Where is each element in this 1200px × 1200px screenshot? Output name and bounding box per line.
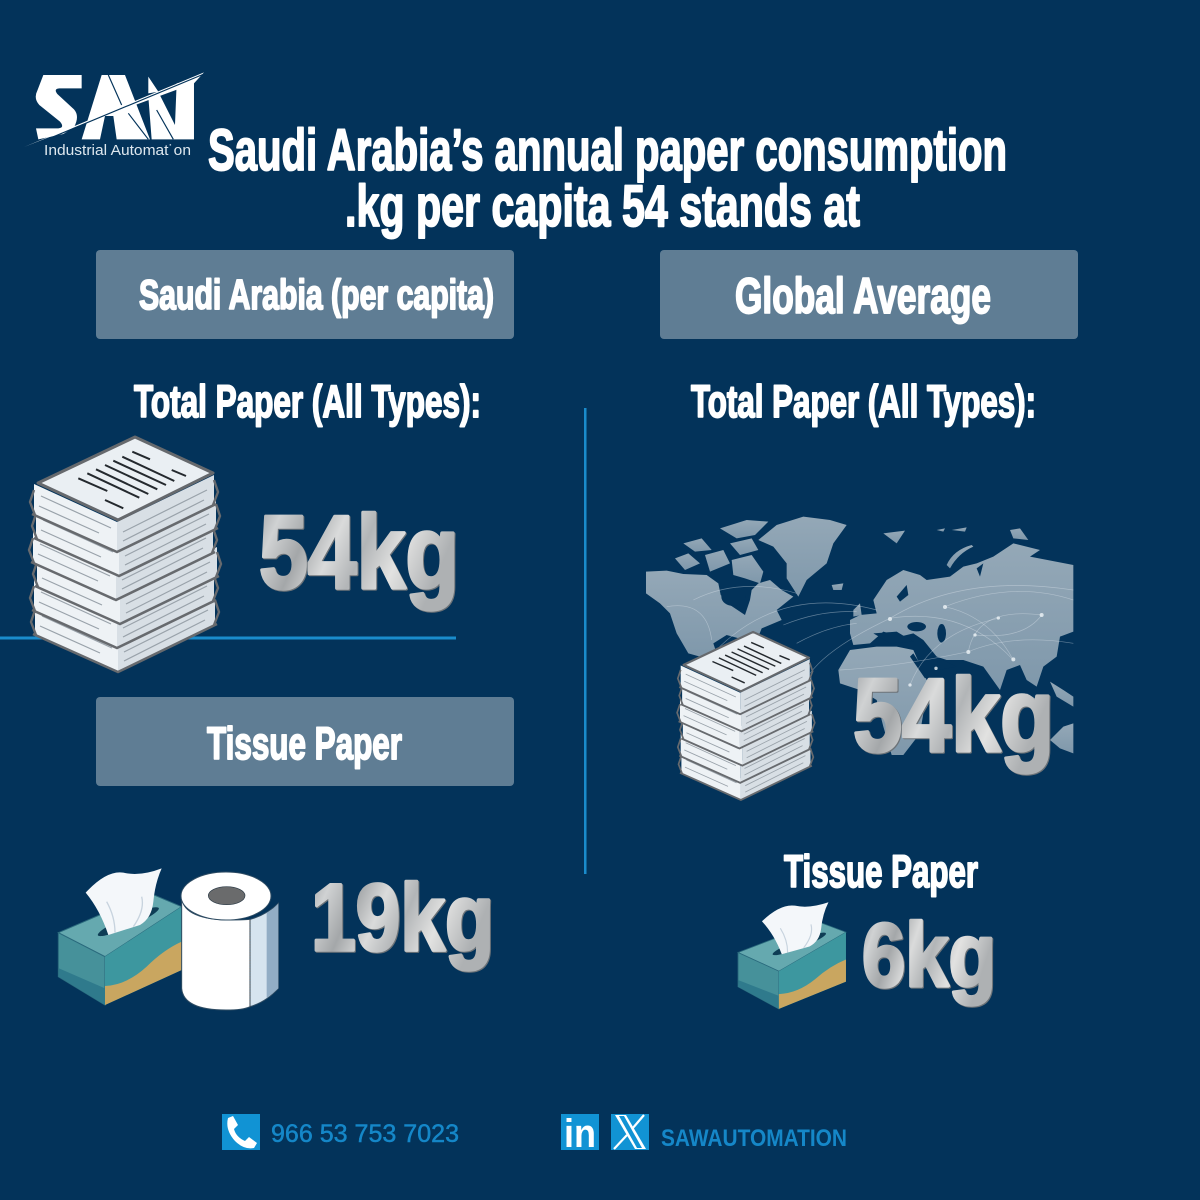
horizontal divider line xyxy=(0,636,456,640)
value: 54kg global: 54kg xyxy=(853,658,1054,774)
value: 6kg: 6kg xyxy=(862,906,996,1006)
icon: X xyxy=(611,1114,649,1150)
panel: Tissue Paper header xyxy=(96,697,514,786)
icon: tissue box xyxy=(58,868,182,1005)
chart: world map xyxy=(646,517,1073,755)
icon: toilet paper roll xyxy=(181,872,278,1010)
map water details xyxy=(721,563,983,678)
map network nodes xyxy=(888,605,1044,687)
social handle: SAWAUTOMATION xyxy=(661,1125,847,1152)
panel: Global Average header xyxy=(660,250,1078,339)
logo mark xyxy=(24,72,204,147)
logo tagline: Industrial Automat˙on xyxy=(44,143,191,159)
icon: LinkedIn: in xyxy=(564,1112,596,1156)
panel: Tissue Paper header: Tissue Paper xyxy=(207,718,402,769)
phone number: 966 53 753 7023 xyxy=(271,1120,459,1148)
panel: Saudi Arabia header: Saudi Arabia (per capita) xyxy=(139,271,494,318)
value: 54kg Saudi: 54kg xyxy=(259,495,459,611)
panel: Saudi Arabia header xyxy=(96,250,514,339)
icon: phone xyxy=(222,1114,260,1150)
icon: tissue box global xyxy=(738,902,846,1009)
title xyxy=(208,118,1007,239)
heading: global total paper: Total Paper (All Types): xyxy=(691,376,1036,427)
map network arcs xyxy=(667,585,1073,685)
icon: paper stack global xyxy=(677,632,815,800)
contact: social media xyxy=(561,1112,847,1156)
heading: global tissue paper: Tissue Paper xyxy=(784,846,978,897)
title: .kg per capita 54 stands at xyxy=(345,174,860,239)
contact: phone xyxy=(222,1114,459,1150)
logo: SAW Industrial Automation xyxy=(24,72,204,159)
icon: paper stack xyxy=(29,437,221,672)
panel: Global Average header: Global Average xyxy=(735,268,991,324)
heading: Saudi total paper: Total Paper (All Types): xyxy=(134,376,481,427)
vertical divider line xyxy=(584,408,586,874)
value: 19kg: 19kg xyxy=(311,865,494,971)
